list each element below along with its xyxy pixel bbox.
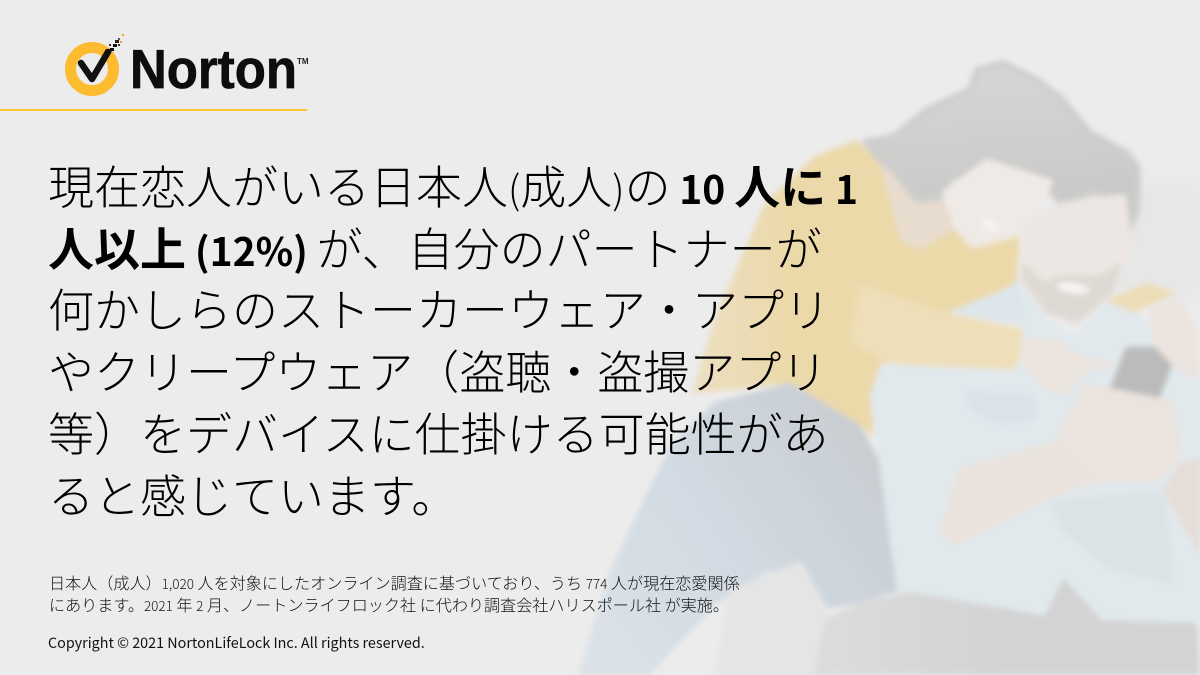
dark trousers (800, 573, 1200, 675)
icon: yellow ring with checkmark (70, 34, 124, 90)
smile (1056, 281, 1090, 295)
man's shirt (873, 280, 1200, 625)
man's face (1020, 197, 1128, 323)
main statement: 現在恋人がいる日本人(成人)の 10 人に 1 (48, 152, 858, 218)
sweater far sleeve (1107, 283, 1177, 320)
jeans (578, 383, 900, 675)
woman's neck (880, 163, 957, 250)
main statement: 何かしらのストーカーウェア・アプリ (48, 275, 830, 341)
wordmark: Norton (130, 38, 297, 100)
trademark: TM (297, 57, 309, 66)
copyright: Copyright © 2021 NortonLifeLock Inc. All rights reserved. (48, 632, 425, 653)
phone (1110, 348, 1177, 402)
main statement: ると感じています。 (48, 461, 457, 527)
wall shading (1090, 180, 1200, 300)
main statement: やクリープウェア（盗聴・盗撮アプリ (48, 337, 827, 403)
shirt upper yoke (947, 280, 1025, 325)
forearm (943, 443, 1093, 543)
holding hand (1060, 387, 1180, 480)
woman's smile (980, 217, 1000, 233)
beard (1022, 262, 1122, 323)
yellow sweater (692, 140, 1027, 437)
main statement: 等）をデバイスに仕掛ける可能性があ (48, 399, 829, 465)
sweater arm highlight (850, 285, 1027, 373)
main statement: 人以上 (12%) が、自分のパートナーが (48, 214, 822, 280)
lower shirt shade (1050, 490, 1175, 585)
survey note: 日本人（成人）1,020 人を対象にしたオンライン調査に基づいており、うち 774 人が現在恋愛関係 (49, 570, 740, 594)
hair (865, 63, 1138, 233)
white sock (718, 565, 825, 675)
yellow divider (0, 109, 307, 111)
main statement (48, 152, 858, 527)
pointing hand (1020, 337, 1120, 397)
fingers on shoulder (1150, 300, 1200, 380)
woman's face (945, 162, 1050, 245)
man's other arm (1163, 457, 1200, 557)
survey note (49, 570, 740, 616)
shirt pocket (963, 390, 1037, 425)
logo: Norton (65, 34, 309, 100)
survey note: にあります。2021 年 2 月、ノートンライフロック社 に代わり調査会社ハリスポール社 が実施。 (49, 592, 729, 616)
